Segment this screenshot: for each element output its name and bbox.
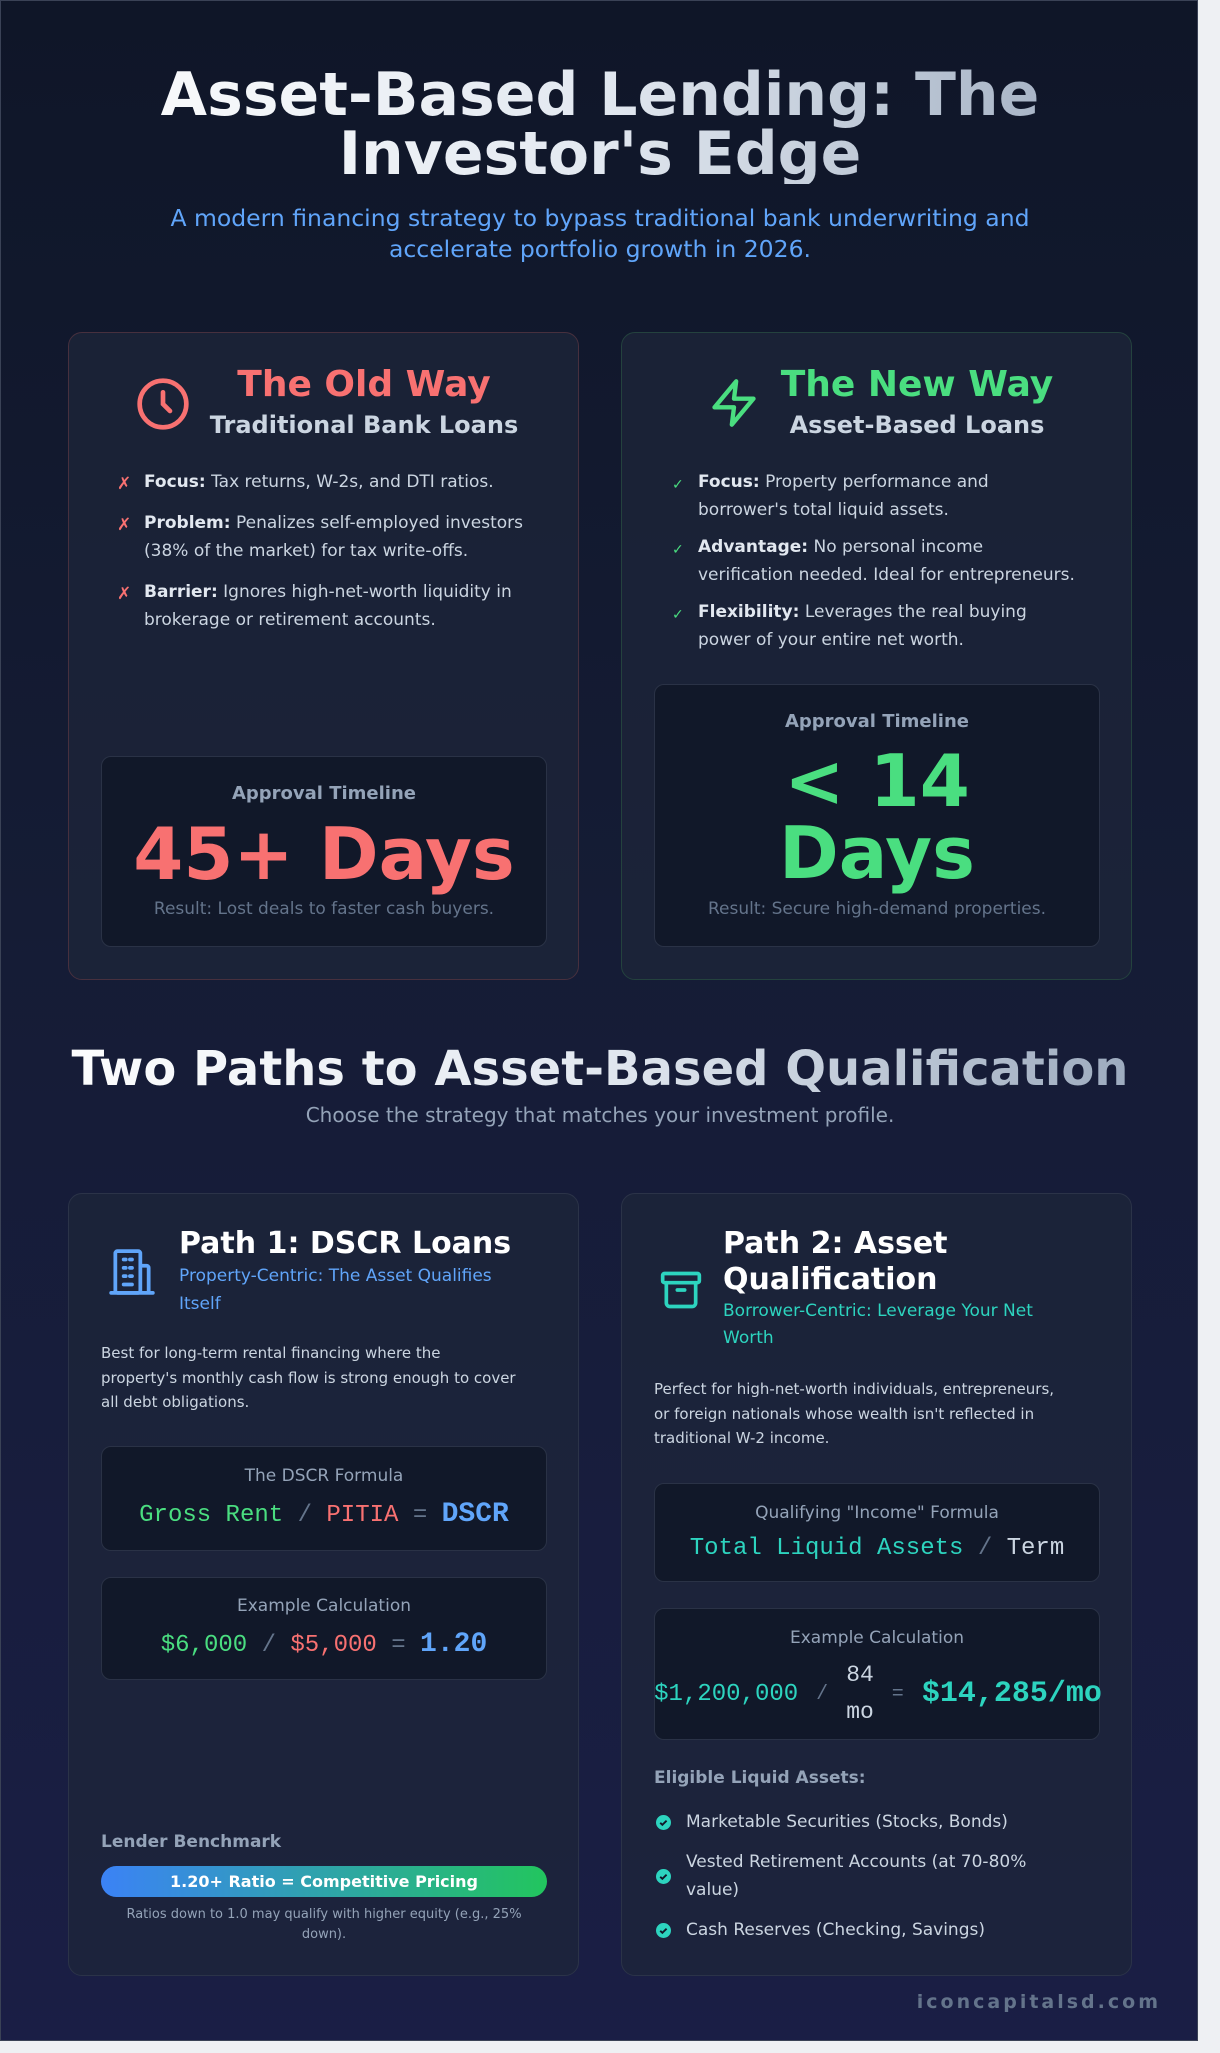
bar: benchmark pill	[101, 1866, 547, 1897]
icon: clock	[137, 378, 189, 430]
panel: path 1 DSCR	[68, 1193, 579, 1976]
timeline box: old: 45+ Days	[133, 812, 515, 896]
heading: path 2: Borrower-Centric: Leverage Your Net Worth	[723, 1301, 1033, 1348]
panel: new way	[621, 332, 1132, 980]
formula box: income	[654, 1483, 1100, 1582]
text: lender benchmark: Lender Benchmark	[101, 1832, 281, 1852]
heading: new way: The New Way	[781, 364, 1053, 405]
example box: income: mo	[846, 1699, 874, 1725]
example box: income: Example Calculation	[790, 1628, 964, 1648]
text: eligible assets: Eligible Liquid Assets:	[654, 1768, 866, 1788]
bullets: old way	[117, 472, 523, 630]
example box: income	[654, 1608, 1100, 1740]
heading: old way	[210, 364, 518, 439]
heading: path 1: Property-Centric: The Asset Qualifies Itself	[179, 1266, 492, 1314]
icon: building	[109, 1249, 155, 1295]
bar: benchmark pill: 1.20+ Ratio = Competitive Pricing	[170, 1872, 478, 1891]
formula box: income: Total Liquid Assets / Term	[690, 1535, 1064, 1562]
formula box: DSCR: The DSCR Formula	[245, 1466, 403, 1486]
example box: DSCR: Example Calculation	[237, 1596, 411, 1616]
title: Asset-Based Lending: The	[161, 60, 1039, 130]
title	[1, 66, 1199, 184]
bullets: new way	[672, 472, 1075, 650]
heading: path 2: Path 2: Asset	[723, 1226, 948, 1261]
timeline box: new: Result: Secure high-demand properties.	[708, 899, 1046, 919]
heading: path 2	[723, 1226, 1033, 1348]
example box: DSCR: $6,000 / $5,000 = 1.20	[161, 1629, 487, 1660]
bullets: old way: ✗	[117, 515, 131, 535]
heading: new way: Asset-Based Loans	[790, 411, 1044, 439]
timeline box: new	[654, 684, 1100, 947]
heading: old way: The Old Way	[237, 364, 491, 405]
example box: income: /	[816, 1682, 828, 1706]
list: eligible assets: Vested Retirement Accounts (at 70-80% value)	[686, 1852, 1026, 1900]
heading: path 2: Qualification	[723, 1262, 938, 1297]
timeline box: new: < 14	[784, 739, 970, 823]
timeline box: old: Approval Timeline	[232, 783, 416, 804]
bullets: old way: ✗	[117, 474, 131, 494]
example box: income: $1,200,000	[654, 1680, 798, 1708]
footer: website: iconcapitalsd.com	[917, 1991, 1161, 2013]
bullets: new way: Advantage: No personal income verification needed. Ideal for entrepreneurs.	[698, 537, 1075, 585]
formula box: income: Qualifying "Income" Formula	[755, 1503, 999, 1523]
bullets: new way: Focus: Property performance and borrower's total liquid assets.	[698, 472, 989, 520]
panel: path 2 asset qualification	[621, 1193, 1132, 1976]
bullets: new way: Flexibility: Leverages the real buying power of your entire net worth.	[698, 602, 1027, 650]
heading: path 1	[179, 1226, 511, 1314]
text: path 1 description: Best for long-term rental financing where the property's monthly cash flow is strong enough to cover all debt obligations.	[101, 1344, 516, 1411]
bullets: old way: Barrier: Ignores high-net-worth liquidity in brokerage or retirement accounts.	[144, 582, 512, 630]
subtitle: A modern financing strategy to bypass traditional bank underwriting and accelerate portfolio growth in 2026.	[170, 204, 1030, 263]
heading: path 1: Path 1: DSCR Loans	[179, 1226, 511, 1261]
subheading: Choose the strategy that matches your investment profile.	[306, 1103, 894, 1127]
timeline box: new: Approval Timeline	[785, 711, 969, 732]
heading: new way	[780, 364, 1053, 439]
formula box: DSCR	[101, 1446, 547, 1551]
list: eligible assets: Cash Reserves (Checking, Savings)	[686, 1920, 985, 1940]
timeline box: old	[101, 756, 547, 947]
formula box: DSCR: Gross Rent / PITIA = DSCR	[139, 1499, 509, 1530]
timeline box: old: Result: Lost deals to faster cash buyers.	[154, 899, 494, 919]
example box: income: $14,285/mo	[922, 1677, 1102, 1711]
icon: archive box	[660, 1272, 702, 1308]
text: path 2 description: Perfect for high-net-worth individuals, entrepreneurs, or foreign nationals whose wealth isn't reflected in traditional W-2 income.	[654, 1380, 1054, 1447]
heading: old way: Traditional Bank Loans	[210, 411, 518, 439]
panel: new way: ✓	[672, 477, 684, 493]
note: Ratios down to 1.0 may qualify with higher equity (e.g., 25% down).	[126, 1907, 522, 1942]
panel: old way	[68, 332, 579, 980]
example box: income: =	[892, 1682, 904, 1706]
example box: DSCR	[101, 1577, 547, 1680]
bullets: old way: ✗	[117, 584, 131, 604]
panel: new way: ✓	[672, 542, 684, 558]
list: eligible assets	[656, 1812, 1026, 1940]
bullets: old way: Focus: Tax returns, W-2s, and DTI ratios.	[144, 472, 494, 492]
panel: new way: ✓	[672, 607, 684, 623]
list: eligible assets: Marketable Securities (Stocks, Bonds)	[686, 1812, 1008, 1832]
heading: two paths: Two Paths to Asset-Based Qualification	[72, 1041, 1128, 1097]
title: Investor's Edge	[339, 119, 861, 189]
icon: lightning	[712, 379, 756, 427]
bullets: old way: Problem: Penalizes self-employed investors (38% of the market) for tax write-offs.	[144, 513, 523, 561]
example box: income: 84	[846, 1662, 874, 1688]
timeline box: new: Days	[779, 811, 975, 895]
